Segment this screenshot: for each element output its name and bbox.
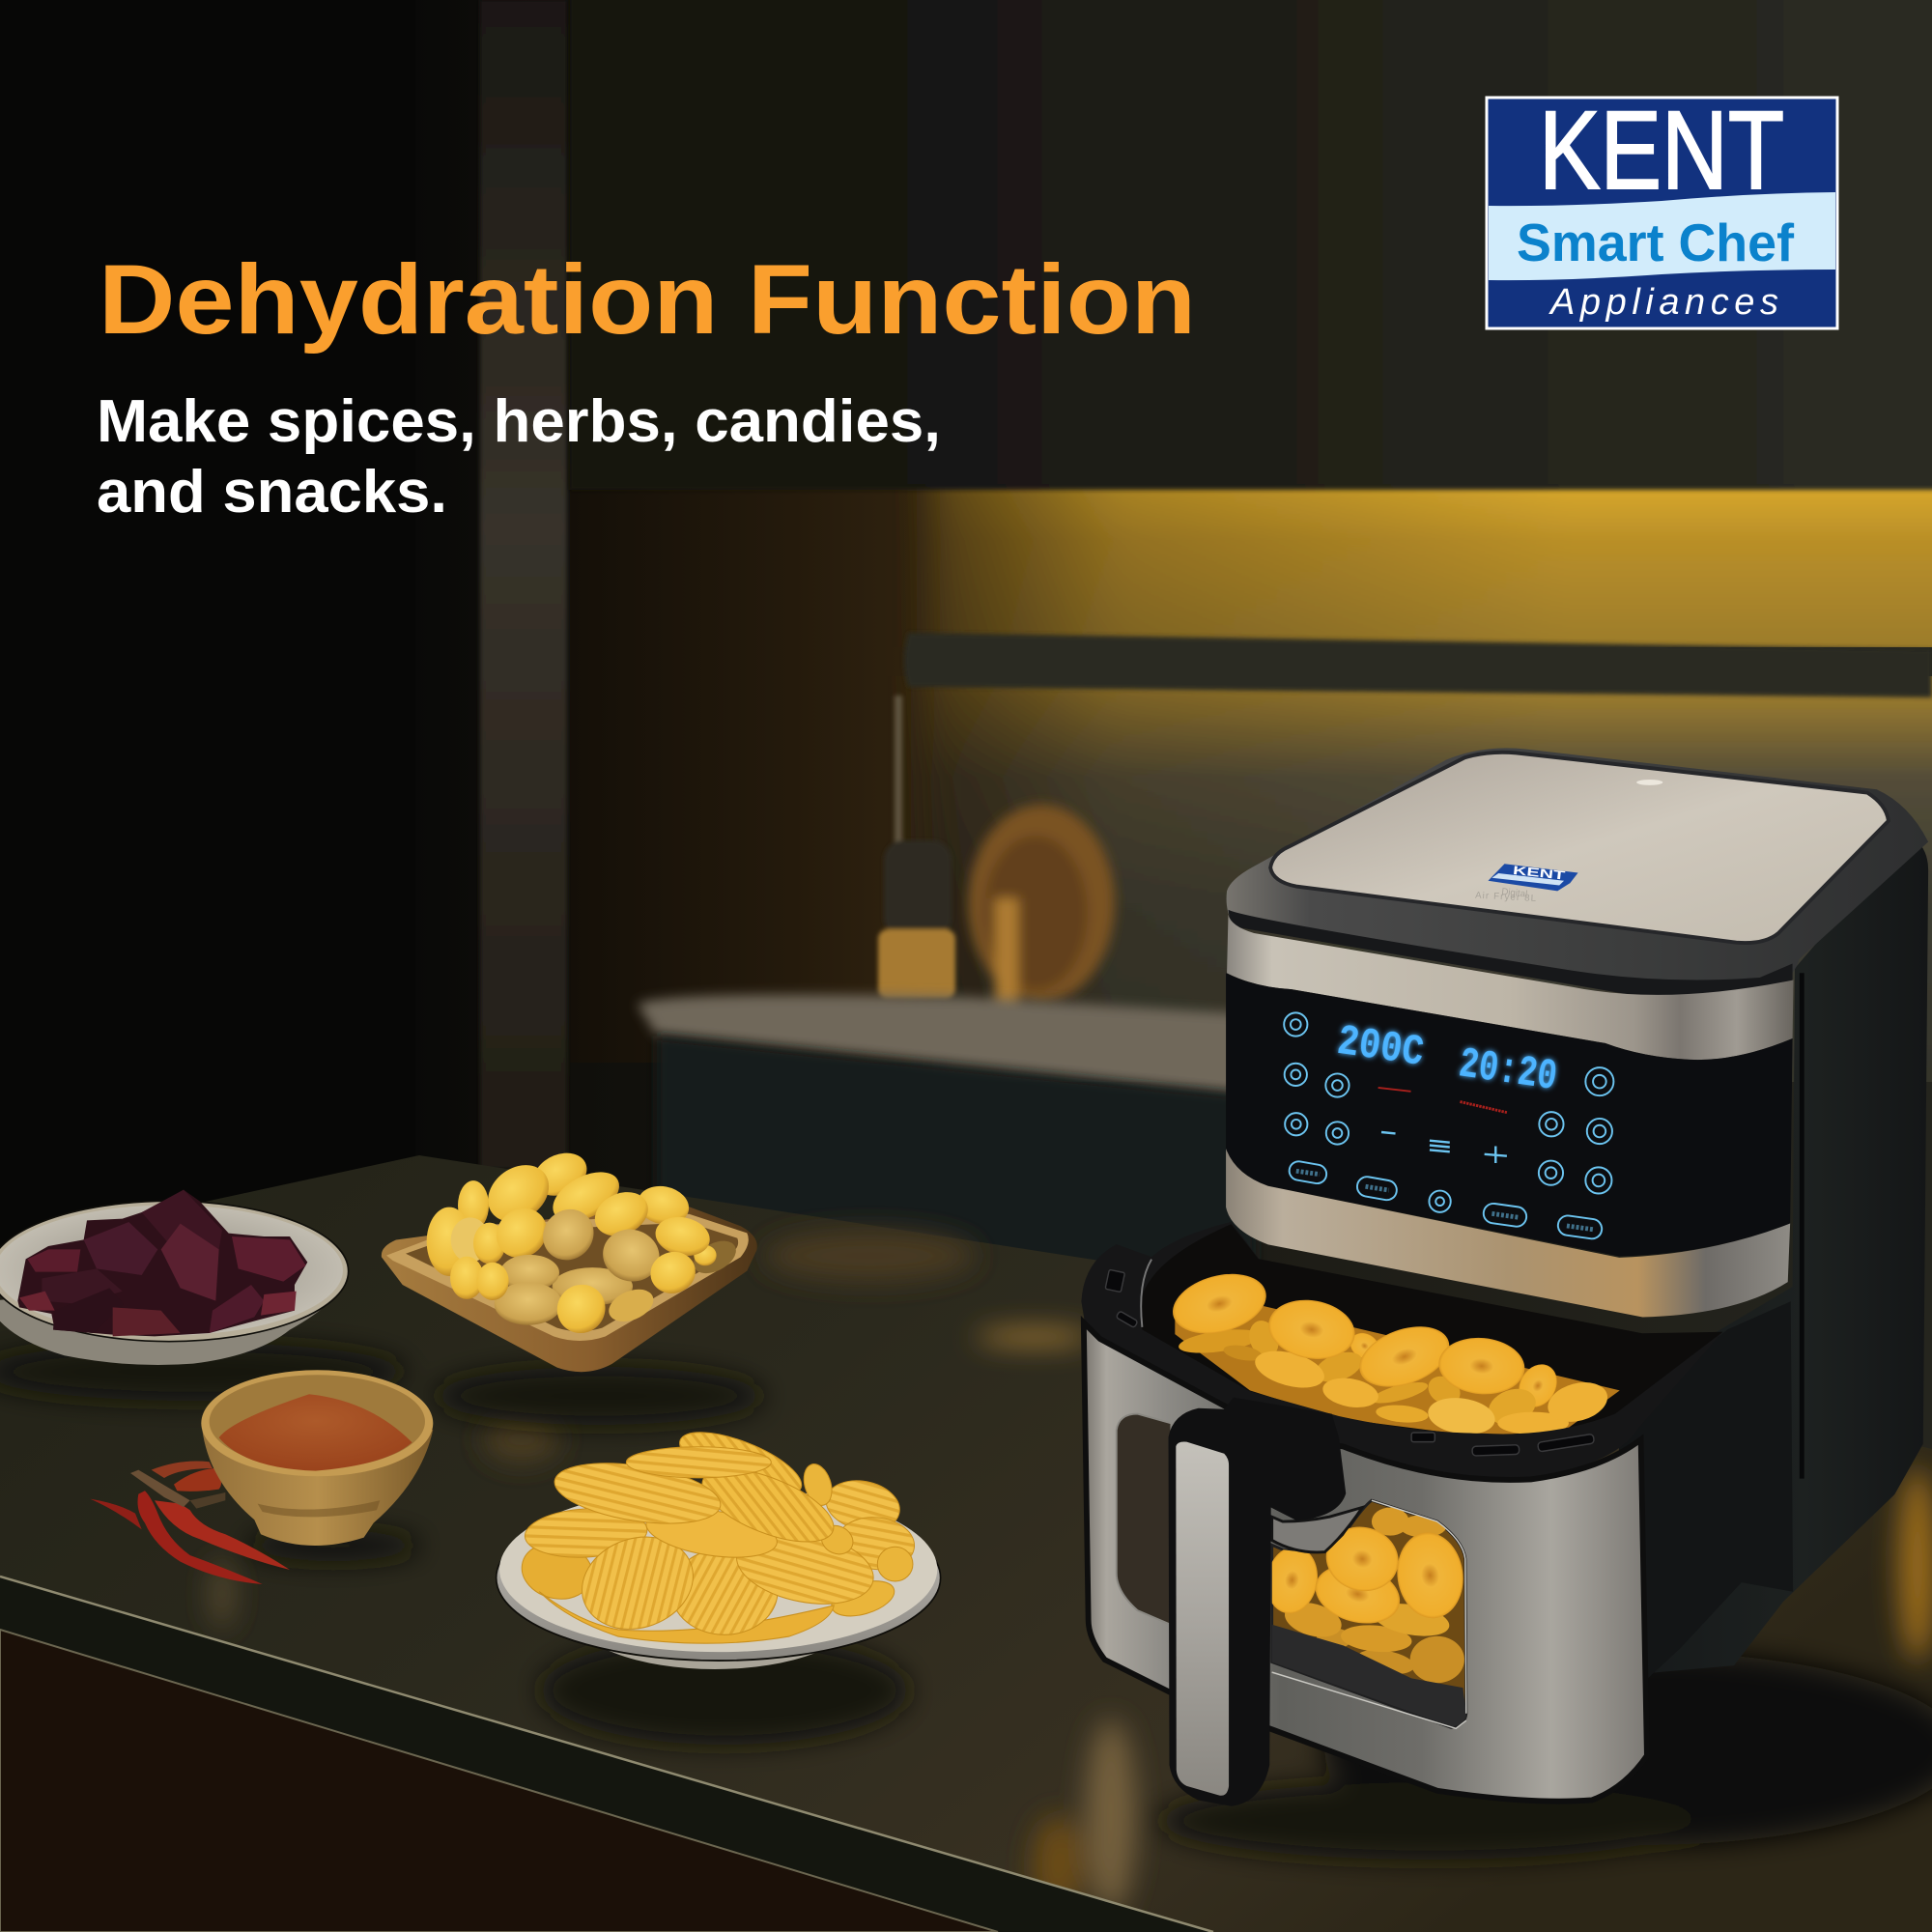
spice mound xyxy=(219,1394,412,1471)
blue LED readout: timer: 20:20 xyxy=(1456,1040,1560,1102)
basket interior xyxy=(1140,1224,1722,1434)
fryer upper body xyxy=(1226,748,1928,1673)
dish: spice bowl xyxy=(201,1370,433,1546)
lid logo badge: Digital xyxy=(1501,887,1528,900)
logo tagline Appliances: Appliances xyxy=(1548,282,1778,323)
bananas through window xyxy=(1262,1508,1468,1683)
upper silver band xyxy=(1227,915,1794,1060)
back counter xyxy=(638,995,1256,1096)
fryer basket and drawer xyxy=(1081,1222,1793,1806)
logo wordmark KENT: KENT xyxy=(1539,89,1784,213)
blurred wooden board xyxy=(968,805,1115,1019)
mid wall warm glow xyxy=(570,464,976,1063)
subtitle: and snacks. xyxy=(97,459,447,526)
food dishes left: bowl, chillies, cup xyxy=(0,1190,433,1584)
lid logo badge: KENT xyxy=(1512,864,1566,883)
left dark wall column xyxy=(0,0,415,1256)
lid logo badge xyxy=(1475,864,1578,904)
dish: white plate with ridged chips xyxy=(497,1419,941,1669)
blurred utensil: bottle xyxy=(878,696,955,999)
side seam xyxy=(1797,973,1806,1479)
counter edge highlight xyxy=(0,1577,1213,1932)
notch behind handle xyxy=(1272,1508,1362,1552)
red indicators xyxy=(1378,1088,1507,1113)
front window xyxy=(1272,1500,1466,1727)
lid silver plate xyxy=(1270,753,1889,943)
ridged chips xyxy=(518,1419,917,1643)
counter front edge xyxy=(0,1577,1213,1932)
window frame bottom xyxy=(1272,1625,1466,1726)
background: dim kitchen wall xyxy=(0,0,1932,1468)
lid logo badge: Air Fryer 8L xyxy=(1475,891,1537,904)
rim silver lip xyxy=(1141,1260,1151,1327)
drawer front xyxy=(1084,1322,1647,1802)
food dishes right: wooden bowl and chips xyxy=(382,1146,941,1669)
logo sub-brand Smart Chef: Smart Chef xyxy=(1517,213,1795,272)
LED light strip xyxy=(928,483,1932,647)
dried berries xyxy=(17,1190,307,1336)
dish: wooden square bowl xyxy=(382,1146,757,1372)
counter base xyxy=(0,1630,998,1932)
shadows on counter xyxy=(0,1343,1932,1860)
handle silver plate xyxy=(1176,1442,1229,1796)
rim groove xyxy=(1229,910,1793,1001)
air fryer xyxy=(1081,748,1928,1806)
basket rim xyxy=(1081,1222,1722,1478)
counter top surface xyxy=(0,1155,1932,1932)
touch icons xyxy=(1284,1012,1613,1240)
power button mark xyxy=(1636,780,1662,785)
subtitle xyxy=(97,388,941,526)
blue LED readout: temperature: 200C xyxy=(1334,1018,1427,1078)
lid outer rim xyxy=(1227,748,1928,998)
upper cabinet xyxy=(570,0,1932,490)
dish: ceramic plate with dried berries xyxy=(0,1190,349,1365)
lower wall xyxy=(923,676,1932,1082)
right side body xyxy=(1619,835,1928,1673)
left side window xyxy=(1117,1414,1171,1625)
bananas in basket xyxy=(1166,1264,1620,1438)
control panel xyxy=(1226,973,1793,1256)
kitchen counter xyxy=(0,1155,1932,1932)
window frame highlight xyxy=(1272,1500,1466,1728)
dish: red chillies xyxy=(90,1462,290,1584)
yellow nuggets xyxy=(427,1146,741,1339)
lower cabinet xyxy=(657,1036,1256,1294)
lower silver band xyxy=(1226,1149,1790,1317)
drawer side housing xyxy=(1615,1301,1793,1678)
subtitle: Make spices, herbs, candies, xyxy=(97,388,941,455)
rim vents xyxy=(1105,1269,1595,1456)
shelf underside xyxy=(904,633,1932,697)
brand logo: KENT Smart Chef Appliances xyxy=(1487,89,1837,328)
warm reflections on counter xyxy=(211,1231,1932,1913)
title: Dehydration Function xyxy=(99,244,1196,355)
pillar xyxy=(480,0,567,1169)
handle xyxy=(1169,1398,1346,1806)
